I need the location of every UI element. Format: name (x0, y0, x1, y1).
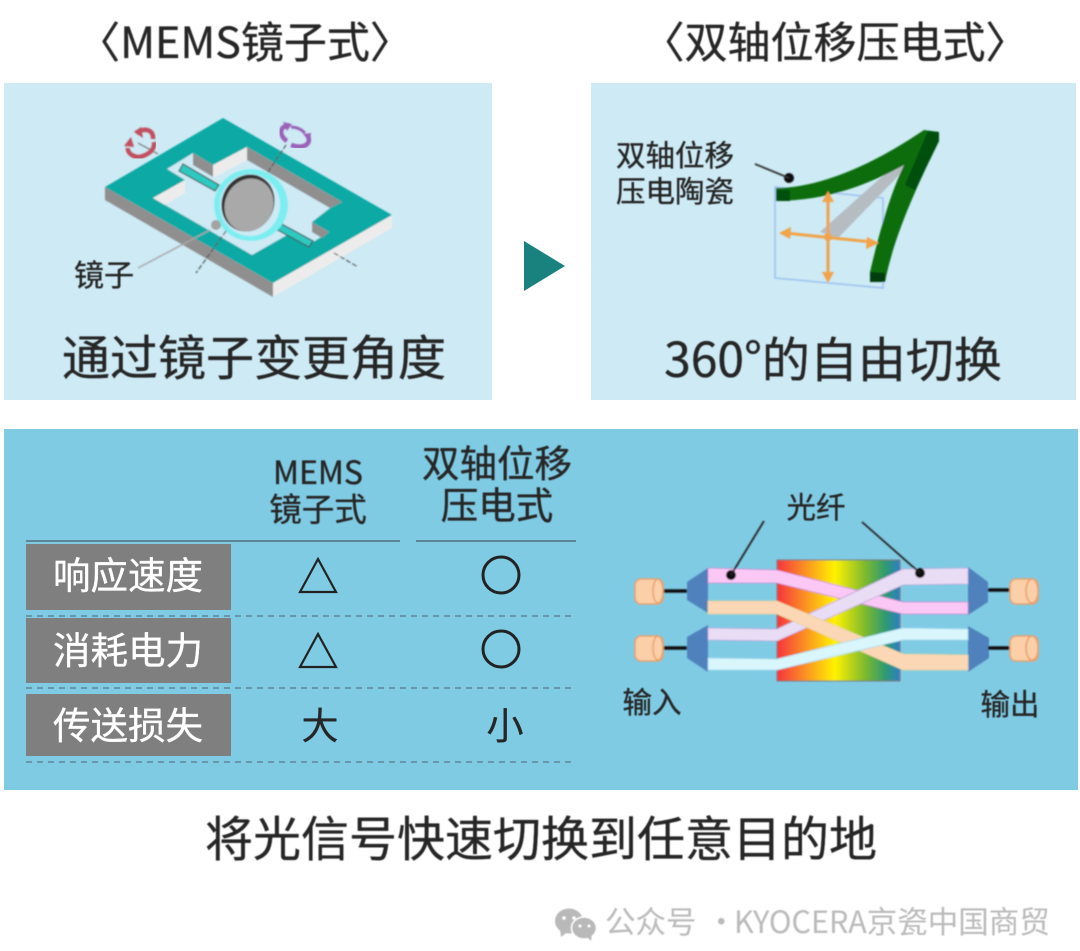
column header: dual-axis piezo type: 双轴位移 (422, 433, 572, 488)
caption: 360 degree switching: 360°的自由切换 (664, 321, 1002, 391)
heading: dual-axis piezoelectric type: 〈双轴位移压电式〉 (642, 9, 1028, 71)
icon: red rotation arrow (124, 127, 154, 157)
watermark (555, 898, 1050, 942)
diagram: optical fiber switch (622, 485, 1040, 724)
label: output: 输出 (980, 682, 1040, 724)
label: optical fiber: 光纤 (786, 485, 846, 527)
column header: MEMS mirror type: 镜子式 (269, 484, 367, 531)
arrow: to the right (524, 241, 565, 291)
row: transmission loss: 大 (302, 696, 338, 750)
label: dual-axis piezo ceramic: 压电陶瓷 (616, 169, 734, 211)
icon: purple rotation arrow (281, 122, 311, 147)
watermark text: · (706, 898, 736, 942)
row: response speed: 响应速度 (53, 545, 203, 600)
label: input: 输入 (622, 680, 682, 722)
row: power consumption (26, 618, 519, 683)
illustration: dual-axis piezoelectric beam (755, 130, 939, 288)
panel: MEMS mirror type (4, 83, 492, 400)
row: transmission loss: 小 (486, 696, 524, 750)
panel: dual-axis piezoelectric type (591, 83, 1076, 400)
panel: comparison and fiber diagram (4, 429, 1078, 790)
row: transmission loss: 传送损失 (53, 695, 203, 750)
column header: dual-axis piezo type (422, 433, 572, 530)
column header: MEMS mirror type (269, 448, 367, 531)
column header: dual-axis piezo type: 压电式 (441, 475, 553, 530)
caption: mirror angle: 通过镜子变更角度 (62, 319, 446, 389)
column header: MEMS mirror type: MEMS (273, 448, 363, 494)
label: dual-axis piezo ceramic (616, 133, 734, 211)
row: power consumption: 消耗电力 (53, 620, 203, 675)
watermark text: KYOCERA京瓷中国商贸 (734, 898, 1050, 942)
label: dual-axis piezo ceramic: 双轴位移 (616, 133, 734, 175)
illustration: MEMS mirror device (105, 118, 392, 297)
caption: switch optical signals: 将光信号快速切换到任意目的地 (205, 800, 877, 870)
table: comparison (26, 433, 576, 762)
row: response speed (26, 544, 519, 610)
label: mirror: 镜子 (74, 251, 134, 295)
row: transmission loss (26, 694, 524, 756)
heading: MEMS mirror type: 〈MEMS镜子式〉 (77, 9, 413, 71)
icon: chat bubbles (555, 908, 596, 941)
watermark text: 公众号 (605, 898, 696, 942)
